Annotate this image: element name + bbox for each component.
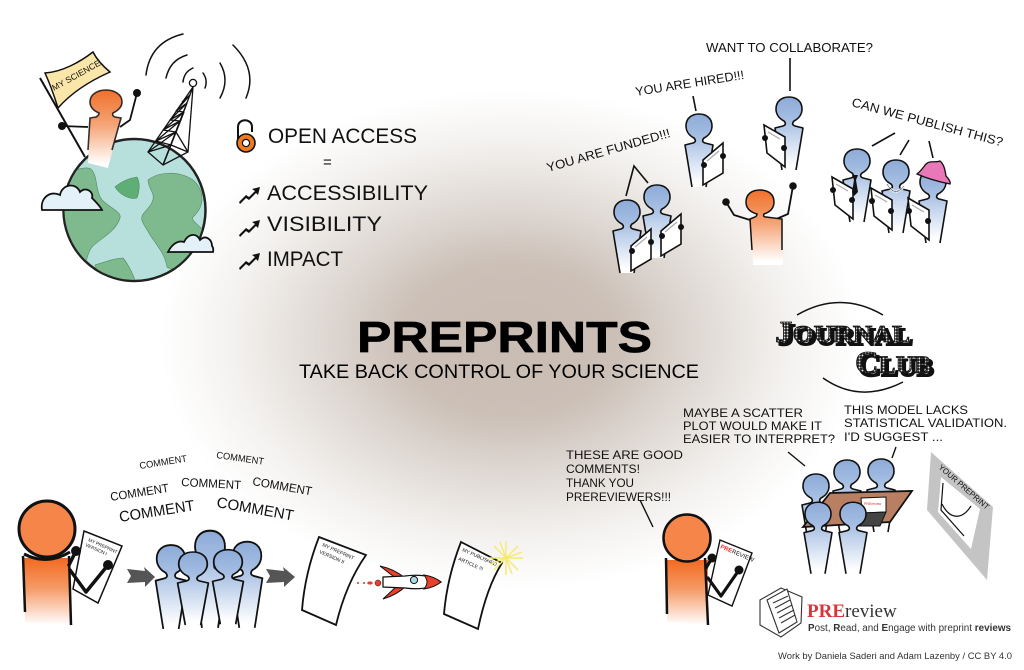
paper: preprint version II: MY PREPRINT xyxy=(321,542,355,562)
speech: thanks: THANK YOU xyxy=(566,476,634,490)
speech: scatter plot: PLOT WOULD MAKE IT xyxy=(683,419,823,433)
equals: = xyxy=(323,154,332,171)
title block xyxy=(299,313,699,383)
comment cloud: COMMENT xyxy=(118,497,196,526)
paper: preprint version II xyxy=(302,537,366,625)
speech: thanks xyxy=(566,448,683,527)
comment cloud: COMMENT xyxy=(109,481,170,504)
speech: statistical validation: I'D SUGGEST ... xyxy=(844,430,943,444)
speech: thanks: THESE ARE GOOD xyxy=(566,448,683,462)
journal club logo: JOURNAL xyxy=(775,314,910,349)
comment cloud: COMMENT xyxy=(215,494,295,524)
globe xyxy=(50,139,207,281)
journal club logo: CLUB xyxy=(855,344,931,380)
icon: envelope with paper xyxy=(760,588,802,637)
star burst xyxy=(489,541,523,575)
you are funded xyxy=(545,126,684,273)
panel: opportunities xyxy=(545,41,1005,273)
panel: peer comment workflow xyxy=(19,450,523,629)
journal club logo: CLUB xyxy=(858,347,934,383)
orange person with arms raised xyxy=(58,89,141,168)
visibility row xyxy=(239,213,382,237)
clouds xyxy=(42,186,102,210)
reviewers at table xyxy=(802,459,912,574)
impact row: IMPACT xyxy=(267,248,343,271)
open access text: OPEN ACCESS xyxy=(268,125,417,148)
hat xyxy=(917,161,950,184)
panel: globe with flag and tower xyxy=(40,34,250,281)
can we publish this xyxy=(830,95,1005,243)
large orange author xyxy=(19,501,122,625)
speech: scatter plot: MAYBE A SCATTER xyxy=(683,406,803,420)
speech: statistical validation: STATISTICAL VALIDATION. xyxy=(844,416,1007,430)
prereview logo xyxy=(760,588,1011,637)
large orange author: VERSION I xyxy=(85,542,108,556)
projected screen: YOUR PREPRINT xyxy=(937,463,991,512)
panel: journal club scene xyxy=(566,403,1007,625)
paper: preprint version II: VERSION II xyxy=(318,549,345,566)
you are funded: YOU ARE FUNDED!!! xyxy=(545,126,672,175)
cloud right xyxy=(168,235,213,252)
paper: published article xyxy=(444,542,502,629)
journal club logo xyxy=(775,302,934,392)
accessibility row: ACCESSIBILITY xyxy=(267,182,428,205)
reviewers at table: PREreview xyxy=(864,502,882,506)
projected screen xyxy=(927,452,993,580)
radio tower xyxy=(148,79,197,165)
speech: statistical validation xyxy=(844,403,1007,458)
subtitle: TAKE BACK CONTROL OF YOUR SCIENCE xyxy=(299,362,699,383)
paper: published article: ARTICLE !!! xyxy=(457,556,484,573)
orange person xyxy=(722,182,797,265)
comment cloud: COMMENT xyxy=(251,474,314,498)
you are hired: YOU ARE HIRED!!! xyxy=(634,68,745,99)
tagline: Post, Read, and Engage with preprint reviews xyxy=(808,623,1011,634)
comment cloud: COMMENT xyxy=(216,450,265,468)
speech: thanks: PREREVIEWERS!!! xyxy=(566,490,671,504)
tie xyxy=(852,175,858,196)
visibility row: VISIBILITY xyxy=(267,213,382,236)
want to collaborate xyxy=(706,41,873,170)
comment cloud: COMMENT xyxy=(181,475,242,492)
flag: MY SCIENCE xyxy=(50,58,102,93)
rocket xyxy=(357,566,441,599)
can we publish this: CAN WE PUBLISH THIS? xyxy=(850,95,1005,149)
arrow xyxy=(266,567,295,587)
radio waves xyxy=(146,34,250,98)
speech: thanks: COMMENTS! xyxy=(566,462,640,476)
speech: statistical validation: THIS MODEL LACKS xyxy=(844,403,968,417)
icon: open access lock xyxy=(237,120,255,152)
comment cloud: COMMENT xyxy=(139,454,188,472)
paper: published article: MY PUBLISHED xyxy=(461,547,498,568)
flag xyxy=(40,52,110,157)
reviewer crowd xyxy=(156,531,262,629)
logotype: PREreview xyxy=(807,601,897,622)
comment cloud xyxy=(109,450,314,526)
title: PREPRINTS xyxy=(357,313,652,362)
orange reader: PREREVIEW xyxy=(719,544,755,564)
you are hired xyxy=(634,68,745,187)
panel: open access list xyxy=(237,120,428,271)
arrow xyxy=(127,567,155,587)
want to collaborate: WANT TO COLLABORATE? xyxy=(706,41,873,55)
necklace xyxy=(887,184,904,192)
journal club logo: JOURNAL xyxy=(778,317,913,352)
credit: Work by Daniela Saderi and Adam Lazenby / CC BY 4.0 xyxy=(778,651,1012,661)
speech: scatter plot: EASIER TO INTERPRET? xyxy=(683,432,835,446)
speech: scatter plot xyxy=(683,406,835,466)
large orange author: MY PREPRINT xyxy=(88,537,118,555)
orange reader xyxy=(664,514,755,625)
